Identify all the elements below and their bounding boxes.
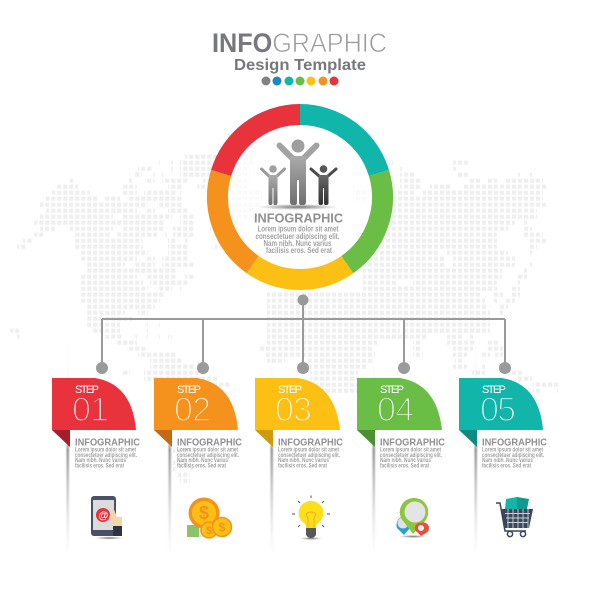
panel: step 3	[255, 345, 343, 555]
panel: step 5: facilisis eros. Sed erat	[482, 464, 531, 470]
panel: step 2	[154, 345, 242, 555]
icon: shopping cart	[496, 497, 533, 537]
panel: step 5: Nam nibh. Nunc varius	[482, 458, 534, 464]
panel: step 2: Lorem ipsum dolor sit amet	[177, 448, 238, 454]
panel: step 2: INFOGRAPHIC	[177, 438, 242, 448]
panel: step 2: 02	[174, 391, 211, 429]
panel: step 4: Lorem ipsum dolor sit amet	[380, 448, 441, 454]
panel: step 3: Nam nibh. Nunc varius	[278, 458, 330, 464]
donut ring	[217, 114, 383, 280]
panel: step 1: Lorem ipsum dolor sit amet	[75, 448, 136, 454]
panel: step 5	[459, 345, 547, 555]
icon: light bulb	[292, 496, 330, 540]
icon: family	[258, 140, 338, 210]
panel: step 4: STEP	[380, 384, 404, 396]
panel: step 3: 03	[275, 391, 312, 429]
panel: step 3: facilisis eros. Sed erat	[278, 464, 327, 470]
panel: step 5: Lorem ipsum dolor sit amet	[482, 448, 543, 454]
panel: step 4: Nam nibh. Nunc varius	[380, 458, 432, 464]
panel: step 1: 01	[72, 391, 109, 429]
panel: step 2: STEP	[177, 384, 201, 396]
icon: coins: $	[219, 520, 226, 534]
centre text: Nam nibh. Nunc varius	[264, 239, 332, 248]
panel: step 5: INFOGRAPHIC	[482, 438, 547, 448]
centre text: facilisis eros. Sed erat	[266, 246, 332, 255]
centre text	[254, 212, 343, 255]
icon: coins	[187, 498, 232, 538]
centre text: Lorem ipsum dolor sit amet	[258, 224, 339, 234]
panel: step 3: INFOGRAPHIC	[278, 438, 343, 448]
panel: step 3: Lorem ipsum dolor sit amet	[278, 448, 339, 454]
title: infographic: INFOGRAPHIC	[212, 28, 387, 58]
panel: step 4	[357, 345, 445, 555]
panel: step 1: consectetuer adipiscing elit.	[75, 453, 137, 459]
panel: step 4: consectetuer adipiscing elit.	[380, 453, 442, 459]
panel: step 2: Nam nibh. Nunc varius	[177, 458, 229, 464]
icon: coins: $	[206, 525, 212, 537]
panel: step 1: INFOGRAPHIC	[75, 438, 140, 448]
icon: phone: @	[98, 510, 108, 522]
icon: coins: $	[199, 503, 209, 523]
subtitle: Design Template	[234, 57, 366, 74]
panel: step 1	[52, 345, 140, 555]
panel: step 4: 04	[377, 391, 414, 429]
panel: step 1: Nam nibh. Nunc varius	[75, 458, 127, 464]
panel: step 2: consectetuer adipiscing elit.	[177, 453, 239, 459]
panel: step 1: facilisis eros. Sed erat	[75, 464, 124, 470]
panel: step 2: facilisis eros. Sed erat	[177, 464, 226, 470]
panel: step 4: INFOGRAPHIC	[380, 438, 445, 448]
panel: step 3: consectetuer adipiscing elit.	[278, 453, 340, 459]
icon: map pins	[396, 498, 429, 538]
panel: step 5: STEP	[482, 384, 506, 396]
connector lines	[96, 294, 511, 374]
panel: step 3: STEP	[278, 384, 302, 396]
icon: phone	[91, 496, 123, 540]
panel: step 4: facilisis eros. Sed erat	[380, 464, 429, 470]
centre text: INFOGRAPHIC	[254, 212, 343, 226]
panel: step 1: STEP	[75, 384, 99, 396]
world map dots	[10, 157, 560, 481]
panel: step 5: 05	[480, 391, 516, 429]
colour dots	[262, 76, 338, 86]
panel: step 5: consectetuer adipiscing elit.	[482, 453, 544, 459]
centre text: consectetuer adipiscing elit.	[256, 232, 340, 241]
